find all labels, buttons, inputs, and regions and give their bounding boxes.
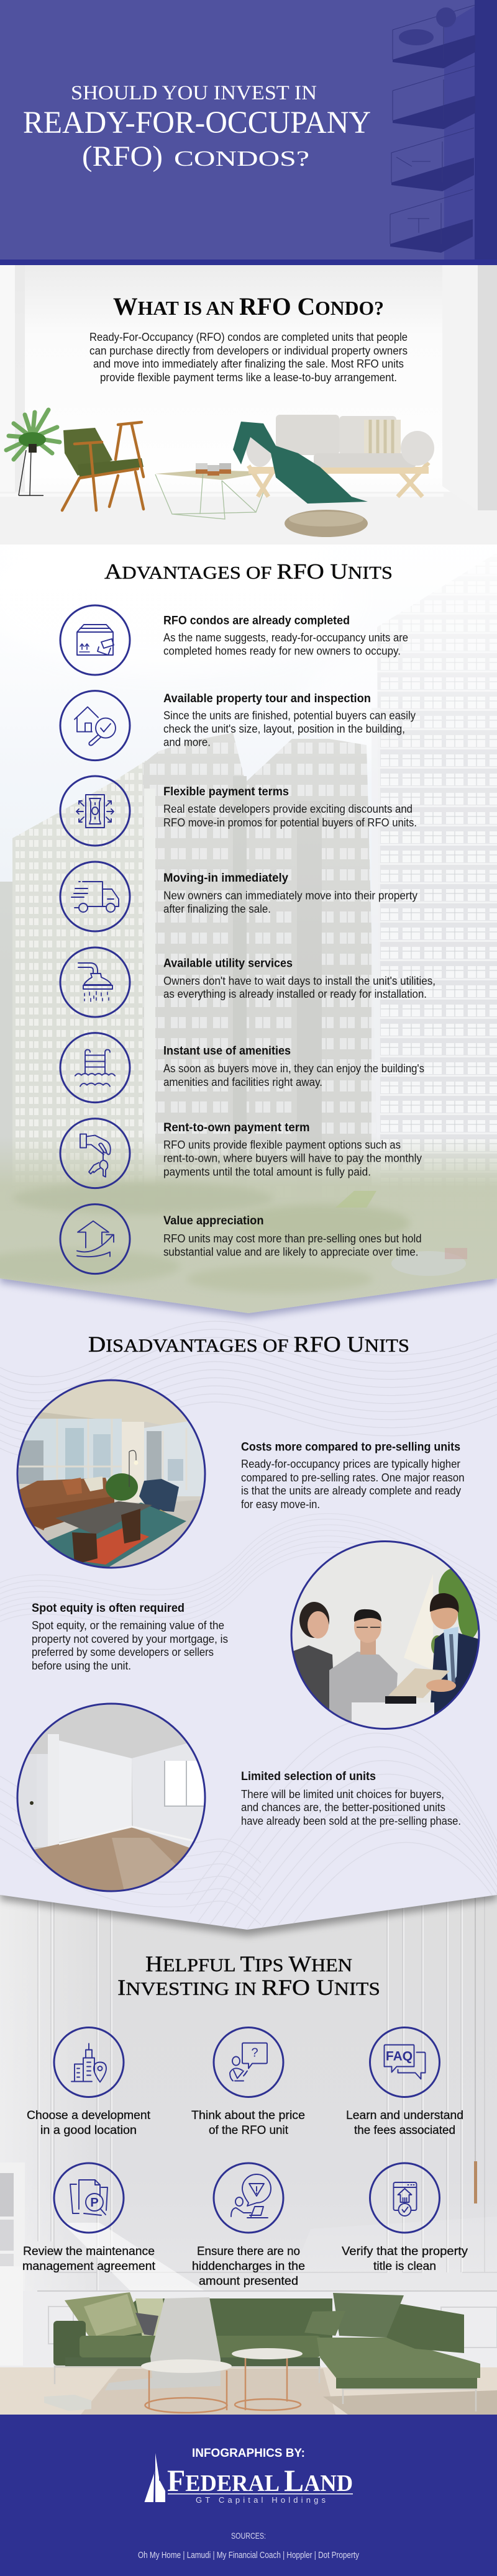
illustration: coffee table with cups (155, 463, 271, 519)
illustration: fern on stand (6, 410, 60, 495)
item text: Moving-in immediately (163, 872, 288, 885)
disadvantage text: limited selection: There will be limited unit choices for buyers, (241, 1788, 444, 1801)
tip label: Learn and understand (346, 2109, 463, 2122)
icon: moving truck (60, 862, 130, 931)
logo: Federal Land: GT Capital Holdings (196, 2495, 326, 2505)
item text (163, 957, 435, 1000)
item text: after finalizing the sale. (163, 903, 271, 915)
side tables (141, 2348, 303, 2413)
heading: helpful tips: HELPFUL TIPS WHEN (145, 1951, 352, 1976)
disadvantage text: costs more: Ready-for-occupancy prices are typically higher (241, 1458, 460, 1470)
tip: verify property title (342, 2163, 468, 2273)
item text: RFO move-in promos for potential buyers of RFO units. (163, 816, 417, 829)
advantage item: value appreciation (60, 1204, 422, 1274)
item text: amenities and facilities right away. (163, 1076, 322, 1088)
advantage item: amenities (60, 1033, 424, 1103)
tip label: Review the maintenance (23, 2245, 155, 2258)
intro paragraph (89, 331, 408, 384)
wave pattern (0, 1321, 497, 2023)
banner divider band (0, 260, 497, 265)
panel: what is an RFO condo (0, 265, 497, 545)
tip label (192, 2245, 305, 2288)
heading: helpful tips: INVESTING IN RFO U NITS (117, 1975, 380, 2000)
advantage item: moving-in (60, 862, 417, 931)
icon: house with magnifier (60, 691, 130, 761)
icon: person with warning bubble (214, 2163, 283, 2233)
disadvantage text: spot equity: property not covered by your mortgage, is (32, 1633, 228, 1645)
item text: Value appreciation (163, 1214, 263, 1227)
item text (163, 692, 416, 749)
tip label: the fees associated (354, 2124, 455, 2137)
heading: advantages: ADVANTAGES OF RFO U NITS (104, 559, 393, 584)
icon: pool ladder (60, 1033, 130, 1103)
disadvantage photo: empty room (17, 1704, 205, 1894)
panel: title banner (0, 0, 497, 260)
intro paragraph: and move into immediately after finalizing the sale. Most RFO units (93, 358, 404, 370)
disadvantage photo: living room (17, 1380, 205, 1571)
item text: and more. (163, 736, 211, 749)
advantage item: property tour (60, 691, 416, 761)
item text: Available utility services (163, 957, 293, 970)
illustration: woven pouf (285, 510, 368, 537)
item text: As the name suggests, ready-for-occupancy units are (163, 631, 408, 644)
item text (163, 1045, 424, 1088)
item text: as everything is already installed or ready for installation. (163, 988, 427, 1000)
item text: check the unit's size, layout, position in the building, (163, 723, 405, 735)
item text (163, 1121, 422, 1178)
advantage item: flexible payment terms (60, 776, 417, 846)
intro paragraph: Ready-For-Occupancy (RFO) condos are completed units that people (89, 331, 408, 343)
item text (163, 1214, 422, 1258)
building with balconies (390, 0, 497, 260)
icon: person with question: ? (251, 2046, 258, 2060)
item text: Flexible payment terms (163, 785, 289, 798)
icon: money with arrows (60, 776, 130, 846)
heading: helpful tips (117, 1951, 380, 2000)
tip: ensure no hidden charges (192, 2163, 305, 2288)
item text: Instant use of amenities (163, 1045, 291, 1058)
title text: SHOULD YOU INVEST IN (71, 82, 317, 104)
item text (163, 872, 417, 915)
heading: WHAT IS AN RFO CONDO? (113, 292, 384, 320)
tip label (191, 2109, 305, 2137)
tip label (22, 2245, 156, 2273)
advantage item: rent-to-own (60, 1119, 422, 1188)
tip label: title is clean (373, 2260, 436, 2273)
disadvantage text: limited selection: have already been sold at the pre-selling phase. (241, 1815, 461, 1827)
icon: person with question (214, 2028, 283, 2097)
tip label (346, 2109, 463, 2137)
icon: buildings with pin (54, 2028, 124, 2097)
advantage item: utility services (60, 947, 435, 1017)
disadvantage photo: buyers with agent (291, 1541, 480, 1733)
disadvantage text: spot equity: preferred by some developers or sellers (32, 1646, 214, 1658)
disadvantage text: limited selection: Limited selection of units (241, 1770, 376, 1783)
item text: Owners don't have to wait days to install the unit's utilities, (163, 975, 435, 987)
tip: choose a development (27, 2028, 151, 2137)
disadvantage text: spot equity (32, 1602, 228, 1672)
sources: Oh My Home | Lamudi | My Financial Coach | Hoppler | Dot Property (138, 2551, 360, 2560)
icon: FAQ bubbles: FAQ (386, 2049, 413, 2064)
disadvantage text: spot equity: Spot equity, or the remaining value of the (32, 1619, 224, 1632)
advantage item: RFO condos are already completed (60, 605, 408, 675)
disadvantage text: costs more: Costs more compared to pre-selling units (241, 1440, 460, 1454)
tip label: hiddencharges in the (192, 2260, 305, 2273)
tip: think about the price (191, 2028, 305, 2137)
disadvantage text: costs more: is that the units are already complete and ready (241, 1485, 461, 1497)
logo: Federal Land: FEDERAL LAND (167, 2463, 353, 2498)
disadvantage text: spot equity: before using the unit. (32, 1660, 131, 1672)
tip label: Ensure there are no (197, 2245, 300, 2258)
icon: box (60, 605, 130, 675)
illustration: green armchair (62, 422, 144, 510)
item text: Rent-to-own payment term (163, 1121, 309, 1134)
item text: Real estate developers provide exciting discounts and (163, 803, 413, 815)
tip: learn and understand (346, 2028, 463, 2137)
sources: SOURCES: (231, 2531, 266, 2541)
title text: READY-FOR-OCCUPANY (23, 106, 371, 140)
item text: Since the units are finished, potential buyers can easily (163, 710, 416, 722)
title text: (RFO) (82, 140, 163, 173)
item text: Available property tour and inspection (163, 692, 371, 705)
icon: house arrow (60, 1204, 130, 1274)
item text: New owners can immediately move into their property (163, 890, 417, 902)
right tower (377, 567, 497, 1170)
disadvantage text: limited selection: and chances are, the better-positioned units (241, 1801, 445, 1814)
tip label: amount presented (199, 2275, 298, 2288)
tip label: Choose a development (27, 2109, 151, 2122)
tip label: Verify that the property (342, 2245, 468, 2258)
item text: RFO units provide flexible payment options such as (163, 1139, 401, 1151)
item text: As soon as buyers move in, they can enjoy the building's (163, 1062, 424, 1075)
sources (138, 2531, 360, 2560)
heading: disadvantages: DISADVANTAGES OF RFO U NITS (88, 1332, 409, 1357)
disadvantage text: costs more: for easy move-in. (241, 1498, 320, 1511)
left towers (12, 761, 149, 1211)
credit label: INFOGRAPHICS BY: (192, 2447, 305, 2460)
icon: verified property phone (370, 2163, 440, 2233)
item text: payments until the total amount is fully paid. (163, 1166, 371, 1178)
tip label (342, 2245, 468, 2273)
panel: tips background (0, 1887, 497, 2415)
icon: hand with keys (60, 1119, 130, 1188)
icon: documents with magnifier: P (90, 2196, 99, 2210)
panel: footer (0, 2415, 497, 2576)
tip label (27, 2109, 151, 2137)
intro paragraph: can purchase directly from developers or individual property owners (89, 345, 408, 357)
disadvantage text: limited selection (241, 1770, 461, 1827)
disadvantage text: costs more (241, 1440, 465, 1511)
title text: CONDOS? (174, 147, 309, 171)
illustration: green sectional sofa (0, 2266, 497, 2415)
middle towers (143, 733, 372, 1176)
item text: RFO condos are already completed (163, 615, 350, 627)
panel: advantages background (0, 522, 497, 1317)
tip: review the maintenance (22, 2163, 156, 2273)
item text (163, 615, 408, 657)
disadvantage text: costs more: compared to pre-selling rates. One major reason (241, 1471, 465, 1484)
item text: substantial value and are likely to appreciate over time. (163, 1245, 419, 1258)
icon: shower (60, 947, 130, 1017)
tip label: in a good location (40, 2124, 137, 2137)
disadvantage text: spot equity: Spot equity is often required (32, 1602, 185, 1615)
intro paragraph: provide flexible payment terms like a lease-to-buy arrangement. (100, 371, 397, 384)
wash fade (157, 554, 497, 754)
item text: rent-to-own, where buyers will have to pay the monthly (163, 1152, 422, 1165)
illustration: sofa with blanket (233, 415, 434, 504)
item text: RFO units may cost more than pre-selling ones but hold (163, 1232, 422, 1245)
tip label: of the RFO unit (209, 2124, 289, 2137)
icon: documents with magnifier (54, 2163, 124, 2233)
item text: completed homes ready for new owners to occupy. (163, 644, 401, 657)
item text (163, 785, 417, 829)
icon: FAQ bubbles (370, 2028, 440, 2097)
title text (23, 82, 371, 173)
tip label: Think about the price (191, 2109, 305, 2122)
gardens (0, 1136, 497, 1316)
panel: disadvantages background (0, 1278, 497, 1940)
tip label: management agreement (22, 2260, 156, 2273)
logo: Federal Land (144, 2453, 353, 2505)
